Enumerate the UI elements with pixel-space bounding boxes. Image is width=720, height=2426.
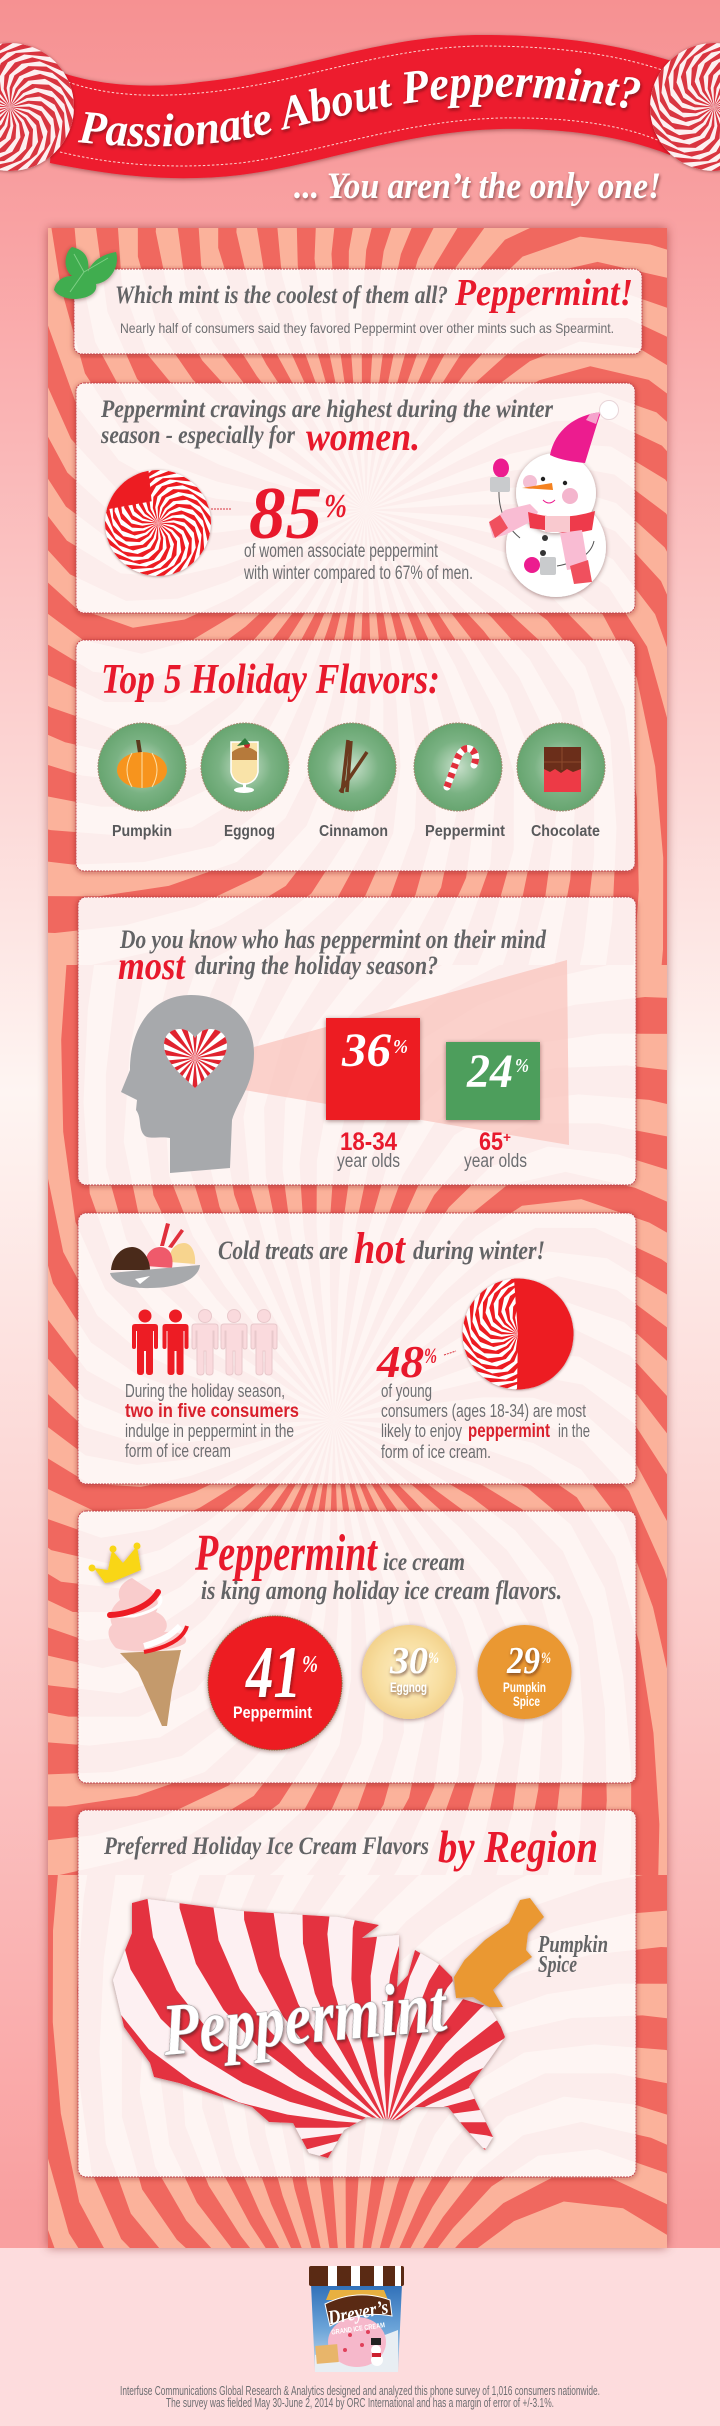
- flavor: chocolate: [517, 723, 605, 840]
- text: two in five: form of ice cream: [125, 1441, 231, 1461]
- stat: 85 percent: %: [324, 488, 347, 525]
- flavor: peppermint: Peppermint: [425, 823, 506, 840]
- heading: who: Do you know who has peppermint on their mind: [119, 925, 547, 954]
- text: two in five: two in five consumers: [125, 1401, 299, 1422]
- text: two in five: [125, 1381, 299, 1461]
- icon: crowned ice cream cone: [88, 1542, 187, 1726]
- panel: which mint: [54, 247, 642, 354]
- heading accent: Peppermint: Peppermint!: [454, 272, 633, 314]
- heading: cravings: Peppermint cravings are highest during the winter: [100, 396, 553, 423]
- panel: by region: [74, 1807, 640, 2182]
- panel: top 5 flavors: [76, 640, 635, 871]
- panel: cold treats: [78, 1213, 636, 1484]
- panel: peppermint is king: [78, 1511, 636, 1783]
- bar: 65 plus: [446, 1042, 540, 1120]
- stat: eggnog 30 percent: %: [428, 1650, 439, 1667]
- label: 18-34: [337, 1128, 400, 1172]
- flavor: peppermint: [414, 723, 506, 840]
- flavor: pumpkin: Pumpkin: [112, 823, 172, 840]
- title text: Passionate About Peppermint?: [78, 68, 644, 151]
- icon: snowman: [489, 400, 618, 597]
- flavor: pumpkin: [98, 723, 186, 840]
- flavor: eggnog: Eggnog: [224, 823, 275, 840]
- flavor: cinnamon: [308, 723, 396, 840]
- stat: 48 percent: %: [424, 1343, 437, 1368]
- body text: Nearly half of consumers said they favored Peppermint over other mints such as Spearmint.: [120, 320, 614, 336]
- icon: right peppermint candy: [648, 42, 720, 174]
- flavor: cinnamon: Cinnamon: [319, 823, 388, 840]
- heading accent: by region: by Region: [438, 1821, 598, 1872]
- icon: ice cream tub: Dreyer’s: [325, 2296, 390, 2330]
- stat: pumpkin spice 29 percent: Pumpkin: [503, 1679, 546, 1695]
- text: young consumers: consumers (ages 18-34) are most: [381, 1401, 586, 1421]
- bar: 18-34: %: [393, 1036, 408, 1058]
- dotted leader: [211, 508, 232, 510]
- label: pumpkin spice: Spice: [538, 1952, 577, 1978]
- heading accent: Peppermint: Peppermint: [194, 1525, 378, 1582]
- chart: 85 percent candy: [103, 468, 213, 578]
- footer background: [0, 2248, 720, 2426]
- bar: 18-34: [326, 1018, 420, 1120]
- stat: 85 percent: 85: [249, 473, 322, 555]
- icon: ice cream sundae: [110, 1223, 200, 1288]
- label: 65 plus: +: [503, 1129, 511, 1145]
- stat: pumpkin spice 29 percent: Spice: [513, 1693, 540, 1709]
- label: 18-34: 18-34: [340, 1128, 397, 1156]
- text: young consumers: likely to enjoy: [381, 1421, 462, 1441]
- dotted leader: [444, 1351, 456, 1355]
- icon: mint leaves: [54, 247, 117, 299]
- label: 65 plus: [464, 1128, 527, 1172]
- bar: 65 plus: %: [515, 1055, 529, 1077]
- text: two in five: indulge in peppermint in the: [125, 1421, 294, 1441]
- stat: pumpkin spice 29 percent: %: [541, 1650, 551, 1667]
- stat: pumpkin spice 29 percent: 29: [506, 1640, 540, 1682]
- panel: swirl background: [41, 222, 674, 2254]
- map: northeast pumpkin spice: [454, 1898, 544, 2007]
- heading continuation: during winter!: [413, 1236, 545, 1265]
- subtitle: ... You aren’t the only one!: [294, 166, 661, 207]
- flavor: eggnog: [201, 723, 289, 840]
- stat description: with winter compared to 67% of men.: [243, 563, 473, 584]
- map: peppermint states: [110, 1897, 508, 2162]
- stat: 48 percent: 48: [376, 1336, 424, 1387]
- flavor: chocolate: Chocolate: [531, 823, 600, 840]
- heading continuation: during the holiday season?: [195, 951, 438, 980]
- heading: which mint: Which mint is the coolest of them all?: [115, 282, 448, 309]
- icon: peppermint heart: [164, 1029, 227, 1088]
- panel: winter cravings: [76, 383, 635, 613]
- label: 65 plus: year olds: [464, 1151, 527, 1172]
- stat: peppermint 41 percent: Peppermint: [233, 1703, 312, 1722]
- heading: top 5: Top 5 Holiday Flavors:: [101, 657, 440, 703]
- stat: eggnog 30 percent: [362, 1625, 456, 1719]
- stat: pumpkin spice 29 percent: [478, 1625, 572, 1719]
- heading: ice cream: ice cream: [383, 1549, 465, 1576]
- icon: ice cream tub: [309, 2266, 404, 2372]
- stat: eggnog 30 percent: 30: [389, 1640, 428, 1682]
- beam: [244, 960, 569, 1145]
- label: 65 plus: 65: [479, 1128, 503, 1156]
- text: two in five: During the holiday season,: [125, 1381, 285, 1401]
- bar: 65 plus: 24: [466, 1045, 513, 1098]
- stat description: of women associate peppermint: [244, 541, 439, 562]
- label: 18-34: year olds: [337, 1151, 400, 1172]
- chart: 48 percent candy: [460, 1277, 576, 1392]
- label: pumpkin spice: Pumpkin: [537, 1932, 608, 1958]
- icon: left peppermint candy: [0, 42, 76, 174]
- icon: head silhouette: [121, 995, 254, 1173]
- panel: who has peppermint on their mind: [78, 897, 636, 1185]
- text: young consumers: [381, 1381, 590, 1462]
- text: young consumers: peppermint: [468, 1421, 551, 1442]
- text: young consumers: of young: [381, 1381, 432, 1401]
- stat: peppermint 41 percent: %: [302, 1652, 318, 1678]
- stat: peppermint 41 percent: 41: [245, 1632, 301, 1714]
- bar: 18-34: 36: [341, 1024, 391, 1077]
- heading: cold treats: Cold treats are: [218, 1236, 348, 1265]
- text: young consumers: in the: [558, 1421, 590, 1441]
- stat: eggnog 30 percent: Eggnog: [390, 1679, 427, 1695]
- heading accent: women: women.: [306, 414, 420, 459]
- label: peppermint on map: Peppermint: [159, 1965, 451, 2072]
- heading accent: hot: hot: [354, 1224, 407, 1273]
- text: young consumers: form of ice cream.: [381, 1442, 491, 1462]
- stat: peppermint 41 percent: [208, 1616, 342, 1750]
- title banner: [47, 32, 672, 182]
- heading: is king: is king among holiday ice cream flavors.: [201, 1576, 562, 1605]
- heading: cravings: season - especially for: [100, 422, 295, 449]
- pictogram: two in five people: [132, 1310, 277, 1375]
- icon: ice cream tub: GRAND ICE CREAM: [331, 2322, 386, 2337]
- heading: preferred flavors: Preferred Holiday Ice Cream Flavors: [103, 1833, 429, 1860]
- heading accent: most: most: [118, 943, 187, 988]
